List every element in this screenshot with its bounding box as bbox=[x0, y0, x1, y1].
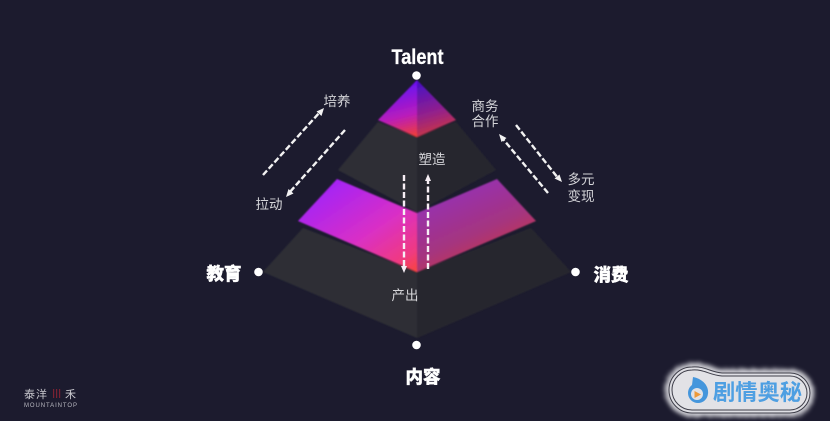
tier: bottom dark bbox=[263, 228, 571, 338]
arrow: vertical up bbox=[425, 174, 431, 269]
pyramid bbox=[263, 80, 571, 338]
arrow: vertical down bbox=[401, 175, 407, 273]
dot: left bbox=[254, 268, 263, 276]
label: 商务合作: 合作 bbox=[472, 114, 498, 129]
label: 消费: 消费 bbox=[594, 265, 629, 285]
arrow: to 拉动 bbox=[286, 130, 345, 197]
logo: MOUNTAINTOP: 禾 bbox=[65, 388, 76, 401]
dot: bottom bbox=[412, 341, 421, 349]
label: 多元变现: 变现 bbox=[568, 189, 594, 204]
label: 多元变现 bbox=[568, 171, 594, 204]
title: Talent: Talent bbox=[392, 46, 444, 69]
arrow: to 多元变现 bbox=[516, 125, 562, 182]
label: 产出: 产出 bbox=[392, 288, 418, 303]
icon: play swirl bbox=[688, 377, 708, 403]
dot: right bbox=[571, 268, 580, 276]
label: 商务合作: 商务 bbox=[472, 99, 498, 114]
logo: MOUNTAINTOP: 泰 bbox=[24, 387, 35, 401]
label: 商务合作 bbox=[472, 99, 498, 129]
label: 教育: 教育 bbox=[206, 264, 242, 284]
watermark badge bbox=[669, 367, 810, 413]
logo: MOUNTAINTOP bbox=[24, 387, 77, 409]
watermark text: 剧情奥秘 bbox=[713, 380, 802, 405]
tier: pink bbox=[298, 179, 536, 272]
label: 拉动: 拉动 bbox=[256, 197, 282, 212]
arrow: to 商务合作 bbox=[499, 134, 548, 193]
tier: apex bbox=[378, 80, 456, 137]
label: 内容: 内容 bbox=[406, 367, 441, 387]
label: 塑造: 塑造 bbox=[418, 152, 446, 167]
label: 培养: 培养 bbox=[324, 94, 350, 109]
arrow: to 培养 bbox=[263, 108, 324, 175]
dot: top bbox=[412, 71, 421, 80]
logo: MOUNTAINTOP: 洋 bbox=[36, 387, 47, 401]
label: 多元变现: 多元 bbox=[568, 171, 594, 187]
logo: MOUNTAINTOP: MOUNTAINTOP bbox=[24, 403, 77, 409]
tier: upper dark bbox=[338, 122, 496, 212]
